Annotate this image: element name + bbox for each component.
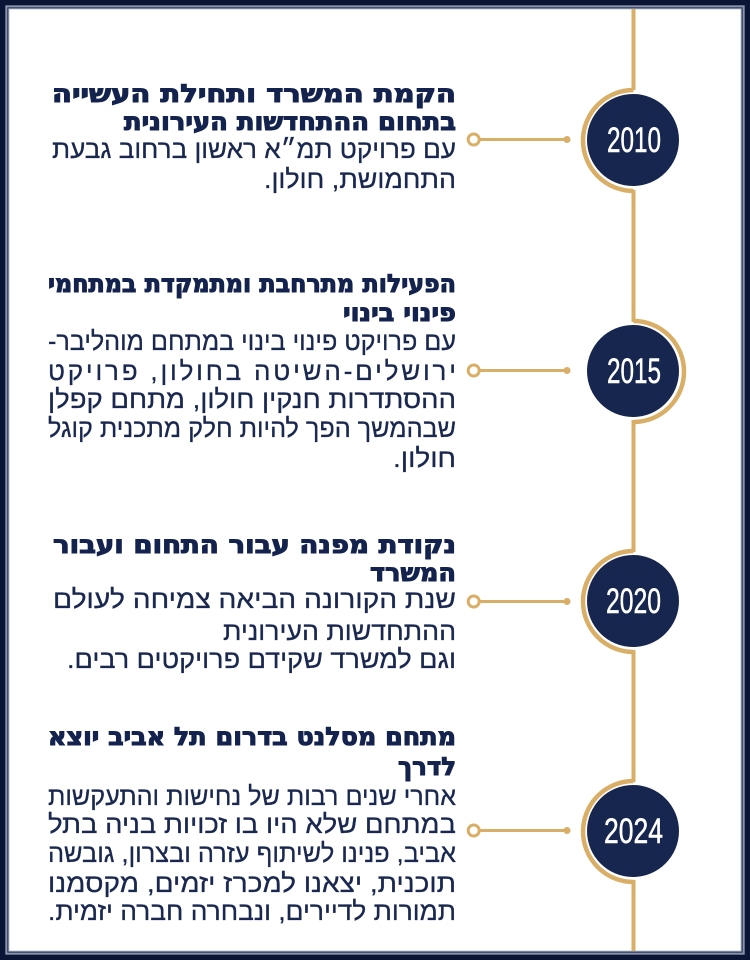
heading 2024: לדרך bbox=[398, 752, 456, 781]
text 2010: עם פרויקט תמ״א ראשון ברחוב גבעת bbox=[52, 134, 456, 164]
text 2024: תוכנית, יצאנו למכרז יזמים, מקסמנו bbox=[48, 868, 456, 898]
year badge 2020 bbox=[587, 555, 679, 647]
heading 2020 bbox=[53, 530, 456, 587]
milestone 2024 bbox=[48, 722, 679, 926]
connector 2024 bbox=[468, 825, 570, 836]
heading 2015 bbox=[48, 269, 456, 327]
text 2020: ההתחדשות העירונית bbox=[223, 616, 456, 646]
arc 2010 bbox=[583, 90, 634, 191]
heading 2010 bbox=[52, 79, 456, 136]
arc 2015 bbox=[634, 321, 684, 422]
year badge 2015: 2015 bbox=[607, 352, 661, 391]
year badge 2015 bbox=[587, 325, 679, 417]
text 2015: עם פרויקט פינוי בינוי במתחם מוהליבר- bbox=[48, 326, 456, 356]
year badge 2024: 2024 bbox=[604, 812, 663, 851]
text 2024: תמורות לדיירים, ונבחרה חברה יזמית. bbox=[48, 896, 456, 926]
text 2024: במתחם שלא היו בו זכויות בניה בתל bbox=[48, 809, 456, 839]
milestone 2020 bbox=[53, 530, 679, 674]
connector 2010 bbox=[468, 134, 570, 145]
text 2020: וגם למשרד שקידם פרויקטים רבים. bbox=[67, 644, 456, 674]
text 2010: התחמושת, חולון. bbox=[264, 164, 456, 194]
year badge 2020: 2020 bbox=[606, 582, 661, 621]
connector 2020 bbox=[468, 596, 570, 607]
heading 2020: המשרד bbox=[370, 558, 456, 587]
text 2020 bbox=[53, 584, 456, 674]
text 2015: חולון. bbox=[393, 443, 456, 473]
text 2024 bbox=[48, 781, 456, 926]
text 2015 bbox=[48, 326, 456, 473]
text 2015: ההסתדרות חנקין חולון, מתחם קפלן bbox=[48, 384, 456, 414]
arc 2020 bbox=[583, 551, 634, 652]
text 2010 bbox=[52, 134, 456, 194]
heading 2015: הפעילות מתרחבת ומתמקדת במתחמי bbox=[48, 269, 456, 298]
text 2024: אביב, פנינו לשיתוף עזרה ובצרון, גובשה bbox=[48, 838, 456, 868]
text 2024: אחרי שנים רבות של נחישות והתעקשות bbox=[48, 781, 456, 811]
text 2020: שנת הקורונה הביאה צמיחה לעולם bbox=[53, 584, 456, 614]
text 2015: שבהמשך הפך להיות חלק מתכנית קוגל bbox=[48, 413, 456, 443]
milestone 2015 bbox=[48, 269, 684, 473]
arc 2024 bbox=[583, 781, 634, 882]
timeline spine bbox=[632, 9, 636, 951]
heading 2010: הקמת המשרד ותחילת העשייה bbox=[52, 79, 456, 108]
heading 2024: מתחם מסלנט בדרום תל אביב יוצא bbox=[48, 722, 456, 751]
year badge 2010 bbox=[587, 94, 679, 186]
heading 2020: נקודת מפנה עבור התחום ועבור bbox=[53, 530, 456, 559]
heading 2010: בתחום ההתחדשות העירונית bbox=[124, 107, 456, 136]
heading 2024 bbox=[48, 722, 456, 781]
year badge 2010: 2010 bbox=[607, 121, 661, 160]
text 2015: ירושלים-השיטה בחולון, פרויקט bbox=[48, 356, 456, 386]
connector 2015 bbox=[468, 365, 570, 376]
heading 2015: פינוי בינוי bbox=[343, 298, 456, 327]
year badge 2024 bbox=[587, 785, 679, 877]
milestone 2010 bbox=[52, 79, 679, 194]
